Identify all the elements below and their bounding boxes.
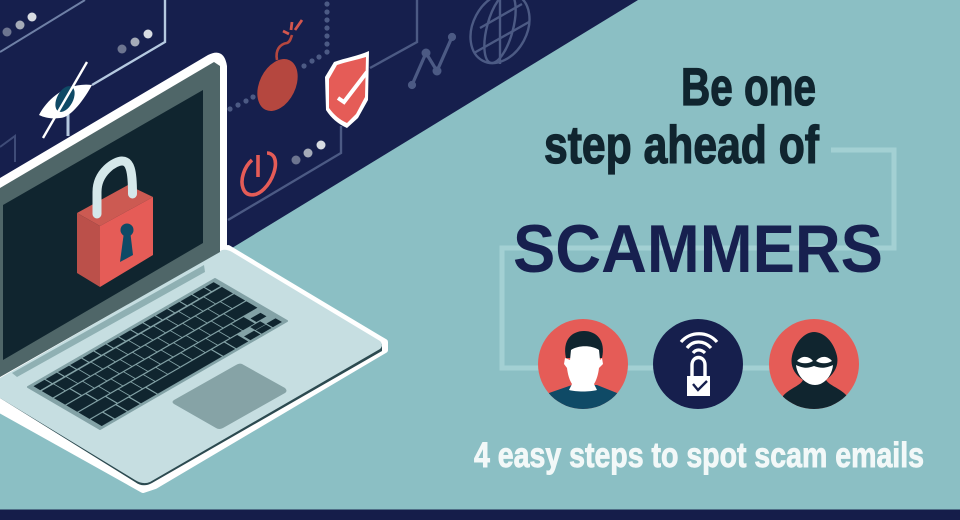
icon: power button [242,153,275,195]
trackpad [172,364,286,429]
icon: shield with check [325,51,369,128]
panel: navy diagonal tech background [0,0,638,300]
heading: Be one: Be one [681,58,816,117]
keyboard [28,279,287,429]
illustration: laptop [0,53,385,490]
icon: bomb [249,20,306,118]
icon: wifi padlock [653,319,743,409]
icon: hooded scammer [769,319,859,412]
dots: beside power icon [292,140,326,164]
laptop screen [0,53,227,378]
icon: person avatar [538,319,628,412]
icon: crossed-out eye [39,62,92,138]
bottom navy bar [0,510,960,520]
icon: red padlock [77,161,153,287]
heading: step ahead of: step ahead of [544,116,819,175]
heading: SCAMMERS: SCAMMERS [513,211,883,287]
icon: line graph [408,33,456,89]
laptop base [0,248,385,490]
icon: globe [459,0,541,73]
dots: top left [2,12,36,36]
light connector line [502,150,894,368]
dotted connector [227,1,330,112]
dots: middle left [118,30,152,54]
